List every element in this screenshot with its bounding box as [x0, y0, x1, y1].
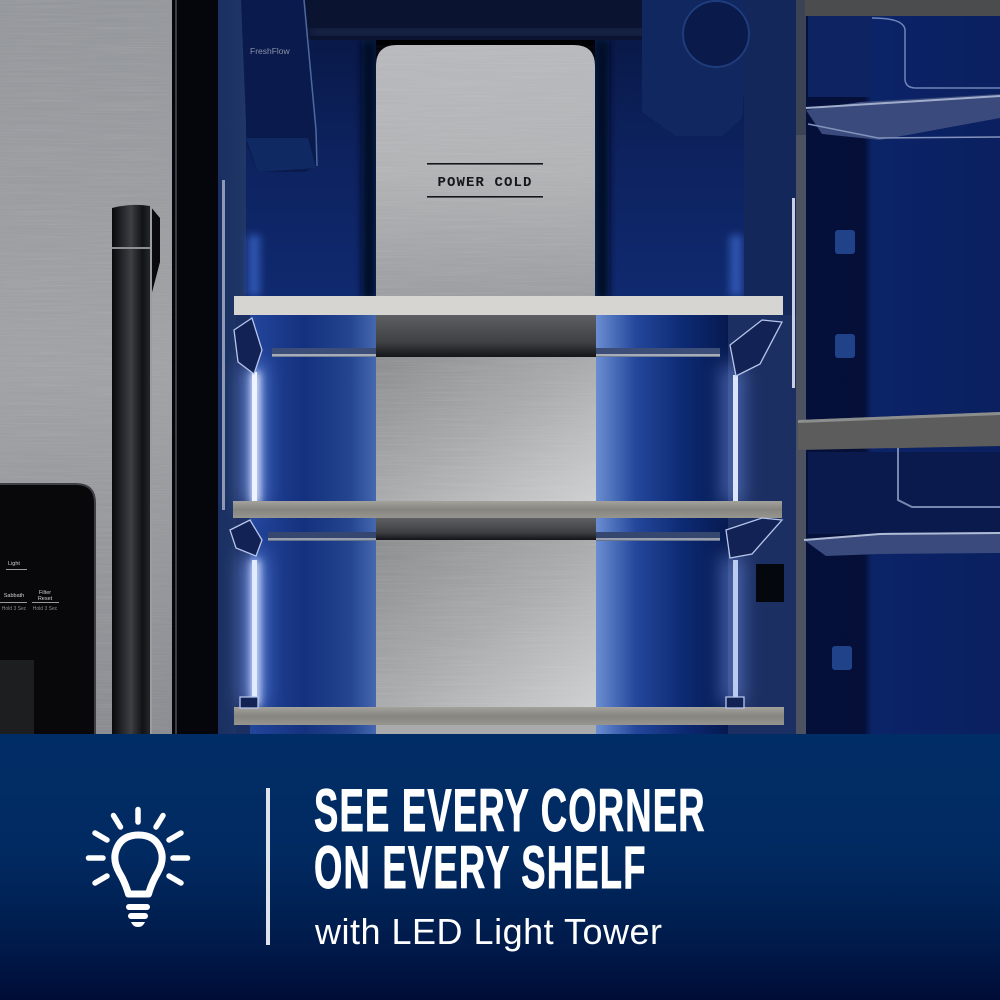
- banner: feature caption: [0, 734, 1000, 1000]
- LED strips: [244, 365, 740, 706]
- dispenser control panel: Hold 3 Sec: [2, 606, 27, 612]
- fridge handle: [112, 205, 160, 735]
- filter housing: [241, 0, 317, 172]
- heading: ON EVERY SHELF: [314, 834, 647, 901]
- divider: [266, 788, 270, 945]
- dispenser control panel: Light: [8, 561, 20, 567]
- dark door edge: [172, 0, 218, 735]
- tower label: POWER COLD: POWER COLD: [437, 175, 533, 191]
- stainless tower: [376, 45, 596, 710]
- subheading: with LED Light Tower: [315, 911, 662, 952]
- side walls: [236, 0, 796, 735]
- upper right vent housing: [642, 0, 744, 136]
- tower label: POWER COLD: [427, 163, 543, 198]
- shelf brackets: [230, 318, 784, 708]
- text: FreshFlow: FreshFlow: [250, 46, 291, 56]
- dispenser control panel: [0, 484, 95, 736]
- stainless door panel: [0, 0, 172, 735]
- shelf front edges: [233, 296, 784, 725]
- heading: [314, 777, 706, 901]
- dispenser control panel: Filter: [39, 590, 51, 596]
- dispenser control panel: Reset: [38, 596, 53, 602]
- glass shelf rods: [268, 348, 720, 541]
- cabinet interior: [246, 0, 746, 735]
- icon: light bulb: [86, 806, 190, 927]
- refrigerator door bins: [792, 0, 1000, 735]
- dispenser control panel: Sabbath: [4, 593, 24, 599]
- photo: open refrigerator door with LED light tower: [0, 0, 1000, 734]
- heading: SEE EVERY CORNER: [314, 777, 706, 844]
- dispenser control panel: Hold 3 Sec: [33, 606, 58, 612]
- vent circle: [683, 1, 749, 67]
